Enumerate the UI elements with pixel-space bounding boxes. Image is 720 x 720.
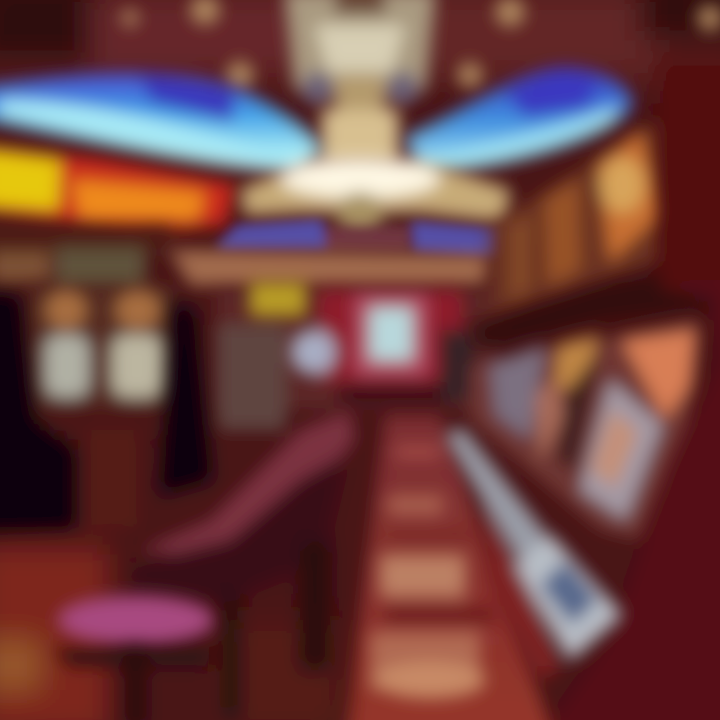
back wall [215, 290, 495, 430]
blue light band: right [405, 68, 632, 172]
carpet pattern [370, 445, 495, 698]
right wall slot bank upper panels [490, 120, 660, 320]
dark columns at left [0, 290, 212, 535]
yellow and red illuminated sign [0, 145, 235, 232]
left slot machines [30, 285, 175, 530]
blue light band: left [0, 74, 322, 172]
right slot machines [470, 320, 700, 540]
central ceiling column [285, 0, 435, 165]
right dark ledge [470, 265, 720, 350]
right dark wall [540, 60, 720, 720]
lower blue ceiling strips [215, 220, 500, 256]
carpet aisle [345, 415, 555, 720]
ceiling cornice [0, 225, 490, 288]
ceiling lights [122, 0, 720, 88]
back wall red stage and screen [291, 290, 474, 407]
yellow sign centre [250, 282, 306, 316]
left carpet [0, 545, 340, 720]
stool and chair legs [55, 540, 330, 720]
right floor-level machine bases [445, 428, 622, 680]
left aisle chairs [130, 410, 355, 600]
ceiling [0, 0, 720, 90]
pink stool seat [58, 596, 214, 644]
central bright ceiling glow [240, 158, 510, 232]
